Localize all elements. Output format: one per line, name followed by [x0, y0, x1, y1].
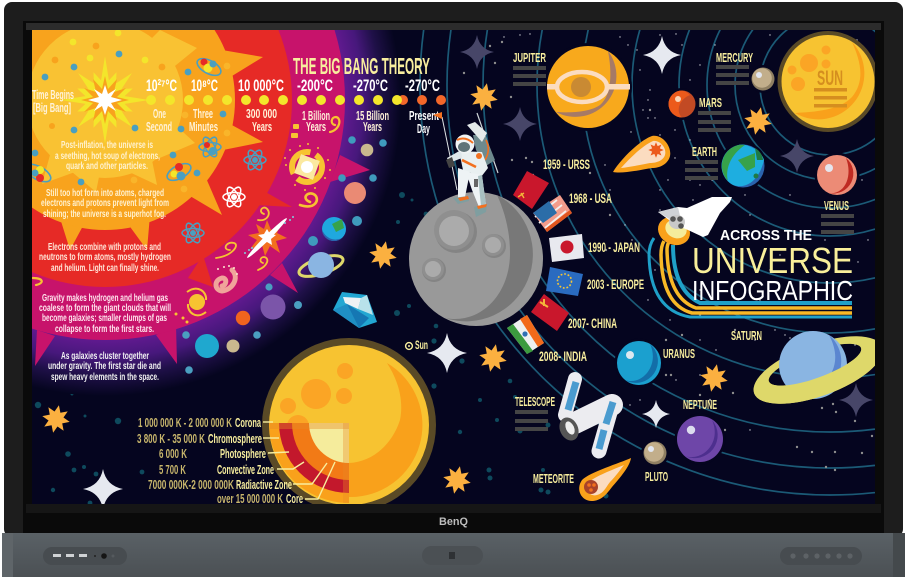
pink swirl galaxy: [216, 266, 237, 291]
sun layer labels: 3 800 K - 35 000 K: [137, 431, 205, 446]
timeline temperatures: [146, 79, 440, 91]
planet label: Venus: [821, 198, 854, 234]
paragraph: post-inflation: [55, 139, 160, 172]
sun layer labels: Chromosphere: [208, 431, 262, 446]
planet label: Sun: [814, 67, 847, 108]
time begins label: [32, 88, 74, 115]
title: across the universe infographic: UNIVERSE: [692, 240, 853, 281]
timeline durations: Day: [417, 122, 430, 136]
paragraph: galaxies cluster: spew heavy elements in the space.: [51, 371, 159, 383]
timeline temperatures: 10²⁷°C: [146, 76, 177, 95]
flag: USA: [533, 195, 572, 232]
launch date labels: 1968 - USA: [569, 190, 612, 206]
timeline durations: One: [153, 107, 166, 121]
planetary orbits: [419, 30, 875, 496]
star dust: [464, 34, 877, 470]
big bang expanding rings: [32, 30, 397, 394]
sun layer labels: 6 000 K: [159, 446, 187, 461]
planet label: Jupiter: JUPITER: [513, 50, 546, 65]
launch date labels: 1990 - JAPAN: [588, 239, 640, 255]
planet: Sun in solar system: [778, 31, 878, 132]
launch date labels: 2008- INDIA: [539, 348, 587, 364]
planets and dots in the purple band: [182, 136, 387, 374]
planet: Jupiter: [544, 43, 632, 131]
timeline durations: 1 Billion: [302, 109, 330, 123]
planet label: Sun: SUN: [817, 67, 843, 90]
planet: Neptune: [674, 414, 726, 464]
BenQ logo: BenQ: [439, 516, 468, 528]
flag: USSR: [513, 171, 549, 209]
timeline durations: Present: [409, 109, 440, 123]
sun layer labels: Core: [286, 491, 303, 506]
paragraph: electrons combine: and helium. Light can finally shine.: [51, 262, 159, 274]
space shuttle: [653, 197, 732, 250]
small spirals: [33, 117, 339, 285]
space telescope: [556, 379, 613, 451]
teal dust in lower left: [35, 192, 609, 505]
sun layer labels: 5 700 K: [159, 462, 186, 477]
paragraph: post-inflation: a seething, hot soup of electrons,: [55, 150, 160, 162]
paragraph: gravity: Gravity makes hydrogen and helium gas: [42, 292, 168, 304]
orange stars: [39, 80, 775, 497]
planet label: Earth: [685, 144, 718, 180]
telescope label: [515, 394, 555, 431]
paragraph: still too hot: Still too hot form into atoms, charged: [46, 187, 164, 199]
paragraph: gravity: coalese to form the giant clouds that will: [39, 302, 171, 314]
screen: [32, 30, 875, 504]
title: across the universe infographic: INFOGRAPHIC: [692, 275, 853, 306]
planet: Mercury: [749, 65, 777, 93]
planet label: Earth: EARTH: [692, 144, 717, 159]
planet label: Uranus: URANUS: [663, 346, 695, 361]
flag: European Union: [546, 267, 583, 296]
launch date labels: 1959 - URSS: [543, 156, 590, 172]
paragraph: galaxies cluster: As galaxies cluster together: [61, 350, 149, 362]
timeline temperatures: -270°C: [353, 76, 388, 95]
sun layer labels: Photosphere: [220, 446, 266, 461]
sun layer labels: over 15 000 000 K: [217, 491, 283, 506]
launch date labels: [539, 156, 644, 364]
sun layer labels: 7000 000K-2 000 000K: [148, 477, 234, 492]
paragraph: gravity: [39, 292, 171, 335]
flag: India: [507, 315, 544, 354]
timeline temperatures: 10 000°C: [238, 76, 284, 95]
sun layer labels: Radiactive Zone: [236, 477, 292, 492]
planet label: Mars: MARS: [699, 95, 722, 110]
planet label: Pluto: PLUTO: [645, 469, 668, 484]
planet label: Mercury: [716, 50, 753, 85]
yellow S swirl galaxy: [176, 124, 299, 322]
timeline durations: Years: [306, 120, 326, 134]
timeline temperatures: -270°C: [405, 76, 440, 95]
planet: Venus: [814, 152, 860, 198]
rocket trail stripes: [649, 238, 852, 317]
planet label: Venus: VENUS: [824, 198, 849, 213]
big bang timeline dots: [146, 95, 446, 105]
planet label: Mars: [698, 95, 731, 132]
paragraph: still too hot: shining; the universe is a superhot fog.: [43, 208, 166, 220]
paragraph: galaxies cluster: [48, 350, 161, 383]
sun layer labels: Convective Zone: [217, 462, 274, 477]
particle dots: [32, 30, 230, 192]
comet: [613, 136, 670, 173]
timeline durations: 15 Billion: [356, 109, 389, 123]
paragraph: electrons combine: Electrons combine with protons and: [48, 241, 161, 253]
big bang explosion: [61, 56, 149, 144]
planet label: Jupiter: [513, 50, 546, 86]
atoms: [23, 55, 266, 245]
sun layer labels: 1 000 000 K - 2 000 000 K: [138, 415, 232, 430]
timeline temperatures: 10⁸°C: [191, 76, 218, 95]
meteorite: [579, 458, 631, 501]
planet label: Neptune: NEPTUNE: [683, 397, 717, 412]
timeline durations: Minutes: [189, 120, 218, 134]
paragraph: galaxies cluster: under gravity. The first star die and: [48, 360, 161, 372]
planet: Mars: [666, 88, 698, 120]
sun layer labels: [137, 415, 303, 506]
sparkle stars: [83, 35, 873, 509]
telescope label: TELESCOPE: [515, 394, 555, 409]
timeline temperatures: -200°C: [297, 76, 333, 95]
time begins label: [Big Bang]: [33, 101, 71, 115]
timeline durations: 300 000: [246, 107, 277, 121]
moon with craters: [409, 192, 543, 326]
planet: Pluto: [641, 439, 669, 467]
launch date labels: 2003 - EUROPE: [587, 276, 644, 292]
sun marker label: Sun: [415, 338, 428, 352]
paragraph: still too hot: electrons and protons prevent light from: [41, 197, 169, 209]
paragraph: gravity: become galaxies; smaller clumps of gas: [42, 312, 167, 324]
title: across the universe infographic: ACROSS THE: [720, 227, 812, 244]
paragraph: post-inflation: quark and other particles.: [66, 160, 148, 172]
planet label: Mercury: MERCURY: [716, 50, 753, 65]
crystal: [333, 292, 377, 328]
paragraph: electrons combine: [39, 241, 171, 274]
paragraph: post-inflation: Post-inflation, the universe is: [61, 139, 153, 151]
sun layer labels: Corona: [235, 415, 261, 430]
meteorite label: METEORITE: [533, 471, 574, 486]
timeline durations: Years: [363, 120, 382, 134]
astronaut with flag: [433, 112, 498, 217]
sun marker label: [404, 340, 428, 350]
large cutaway sun: [262, 338, 436, 512]
planet: Earth: [719, 142, 767, 190]
title: the big bang theory: THE BIG BANG THEORY: [293, 53, 430, 79]
timeline durations: Years: [252, 120, 272, 134]
launch date labels: 2007- CHINA: [568, 315, 617, 331]
timeline durations: Second: [146, 120, 172, 134]
soundbar with controls: [2, 533, 905, 577]
planet: Uranus: [614, 338, 664, 388]
planet label: Saturn: SATURN: [731, 328, 762, 343]
paragraph: gravity: collapse to form the first stars.: [55, 323, 154, 335]
planet: Saturn: [745, 322, 891, 418]
flag: Japan: [549, 234, 584, 262]
flag: China: [531, 294, 569, 331]
time begins label: Time Begins: [32, 88, 74, 102]
title: across the universe infographic: [692, 227, 853, 306]
sun layer leader lines: [263, 422, 335, 499]
paragraph: still too hot: [41, 187, 169, 220]
timeline durations: Three: [193, 107, 213, 121]
supernova with jet: [245, 216, 293, 260]
galaxy swirl: [285, 144, 330, 190]
paragraph: electrons combine: neutrons to form atoms, mostly hydrogen: [39, 251, 171, 263]
timeline durations: [146, 107, 440, 136]
